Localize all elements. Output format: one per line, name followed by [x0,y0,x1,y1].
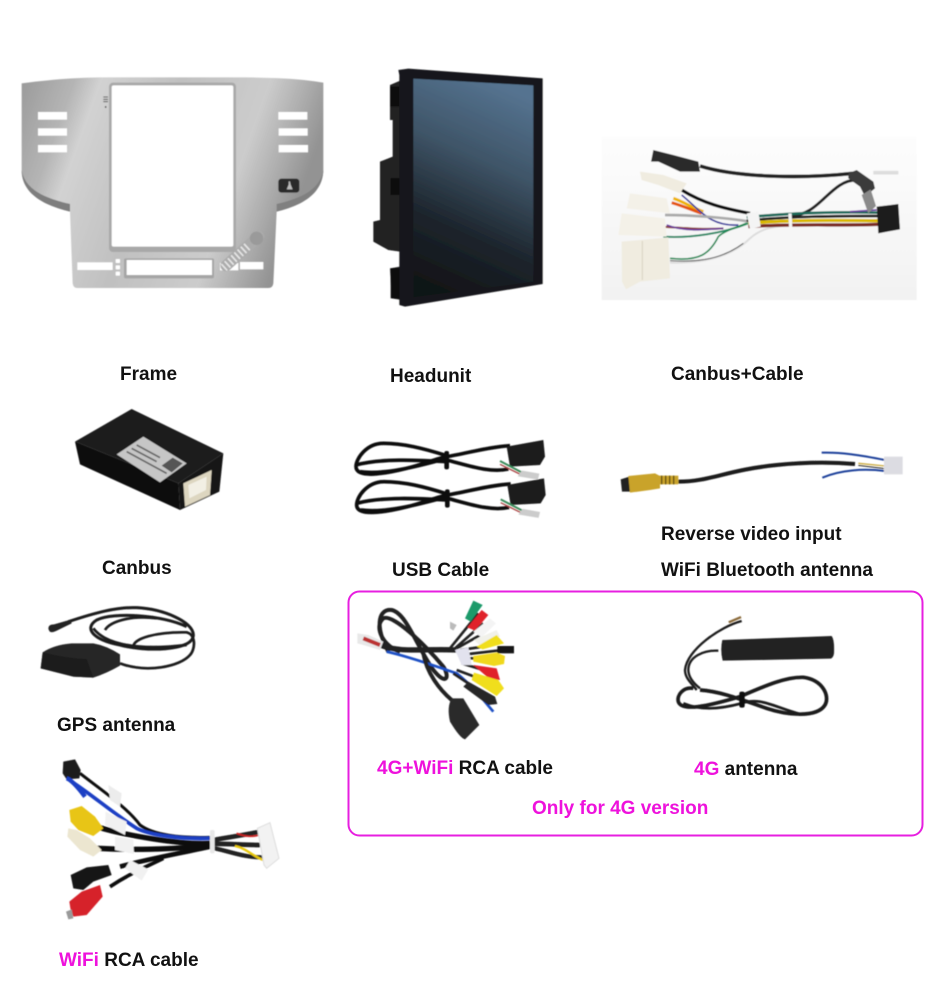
photo: WiFi RCA cable [63,759,279,919]
photo: canbus harness [602,137,917,300]
photo: headunit [373,69,543,307]
label: canbus and cable: Canbus+Cable [671,364,804,385]
label: gps antenna: GPS antenna [57,715,176,736]
label: wifi rca cable: WiFi RCA cable [59,950,199,971]
panel: 4G version [348,592,922,836]
usb cable one [356,440,545,478]
label: wifi bluetooth antenna: WiFi Bluetooth antenna [661,560,873,581]
label: only for 4G version: Only for 4G version [532,798,708,819]
photo: usb cables [356,440,546,516]
photo: frame [22,77,323,288]
photo: 4G WiFi RCA cable [357,601,514,739]
photo: canbus box [75,409,223,510]
label: frame: Frame [120,364,177,385]
label: headunit: Headunit [390,366,472,387]
label: reverse video input: Reverse video input [661,524,842,545]
usb cable two [357,478,546,516]
photo: 4G antenna [678,617,834,714]
photo: gps antenna [41,608,194,678]
label: usb cable: USB Cable [392,560,489,581]
photo: reverse video cable [621,453,903,493]
label: 4G antenna: 4G antenna [694,759,798,780]
label: canbus: Canbus [102,558,172,579]
label: 4G WiFi RCA cable: 4G+WiFi RCA cable [377,758,553,779]
